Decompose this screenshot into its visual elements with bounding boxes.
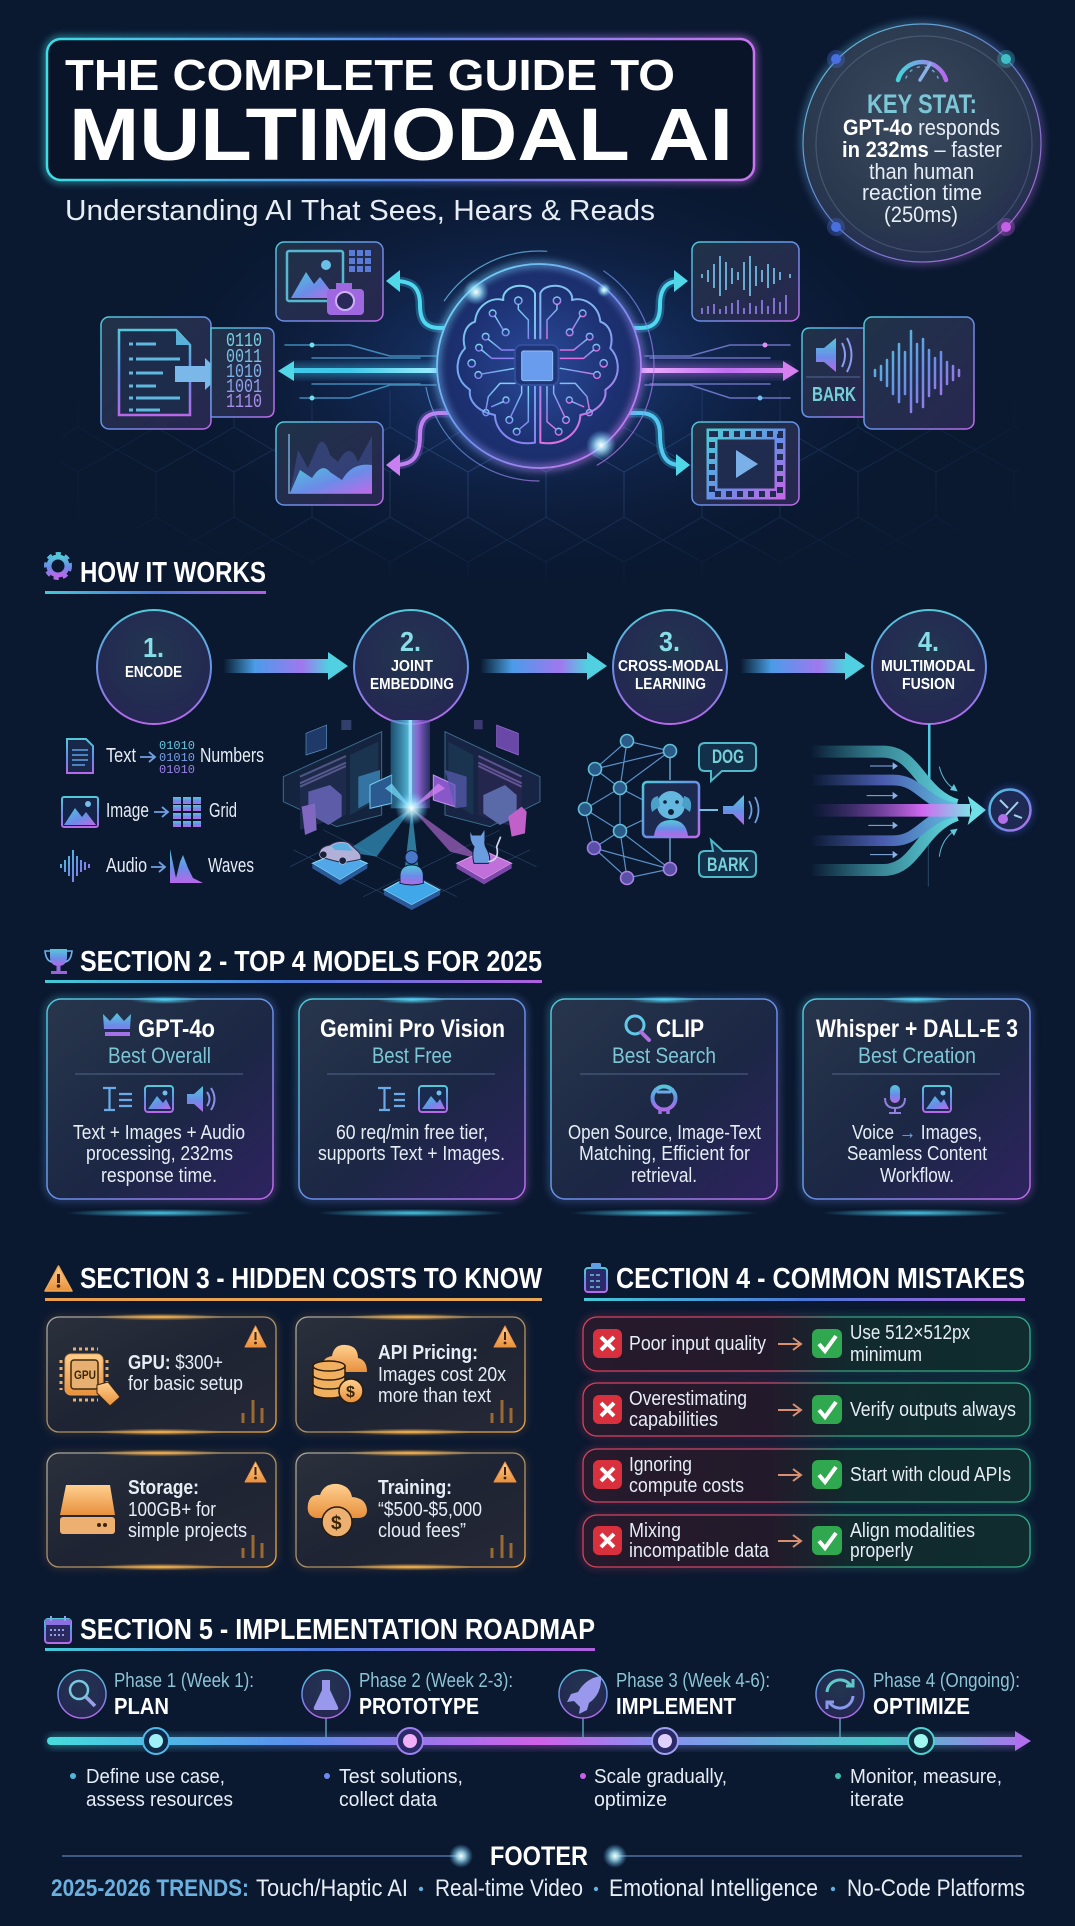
cost text xyxy=(128,1477,247,1542)
model card: Gemini Pro Vision xyxy=(299,996,525,1217)
icons: text, image xyxy=(378,1086,447,1112)
model card: Whisper + DALL-E 3 xyxy=(803,996,1030,1217)
cost text: 100GB+ for xyxy=(128,1499,216,1521)
icons: text, image, audio xyxy=(103,1086,214,1112)
heading: section 3 xyxy=(45,1263,543,1301)
card description: Text + Images + Audio xyxy=(73,1122,245,1144)
step 4 circle: 4. xyxy=(918,626,939,657)
mini bars xyxy=(243,1535,262,1558)
card: document xyxy=(101,317,222,429)
icon: warning xyxy=(245,1326,266,1347)
mistake row 2: Overestimating xyxy=(629,1388,747,1410)
icon: rocket xyxy=(567,1676,601,1714)
phase 2: collect data xyxy=(339,1789,438,1811)
row: image to grid xyxy=(62,797,237,827)
phase 1: Phase 1 (Week 1): xyxy=(114,1670,254,1692)
cost text: Storage: xyxy=(128,1477,199,1499)
mistake row 1 xyxy=(583,1317,1030,1371)
row: text to numbers: Numbers xyxy=(200,745,264,767)
icon: cloud dollar: $ xyxy=(331,1513,342,1534)
icon: trophy xyxy=(45,949,72,974)
row: image to grid: Image xyxy=(106,800,149,822)
cost card: API pricing xyxy=(296,1314,525,1436)
step 2 circle: JOINT xyxy=(391,658,433,675)
row: image to grid: Grid xyxy=(209,800,237,822)
arrow: step 1 to 2 xyxy=(223,652,348,680)
cost text xyxy=(128,1352,243,1395)
speech bubble: dog xyxy=(699,743,756,781)
trends line: Emotional Intelligence xyxy=(609,1875,818,1902)
card: binary xyxy=(211,328,274,417)
arrow: step 2 to 3 xyxy=(480,652,607,680)
row: text to numbers: 01010 xyxy=(159,751,195,765)
platforms xyxy=(312,851,512,910)
joint embedding illustration xyxy=(283,720,540,910)
icon: cloud coins: $ xyxy=(346,1384,355,1401)
mistake row 1: Use 512×512px xyxy=(850,1322,970,1344)
row: text to numbers: 01010 xyxy=(159,763,195,777)
mini bars xyxy=(492,1535,511,1558)
icon: cross xyxy=(593,1395,622,1424)
icon: fusion node xyxy=(987,787,1033,833)
mistake row 3: Ignoring xyxy=(629,1454,692,1476)
network lines xyxy=(585,741,676,878)
mistake row 2: Verify outputs always xyxy=(850,1399,1016,1421)
step 4 circle: MULTIMODAL xyxy=(881,658,975,675)
heading: section 3: SECTION 3 - HIDDEN COSTS TO KNOW xyxy=(80,1263,543,1295)
step 1 circle xyxy=(97,610,211,724)
card description xyxy=(73,1122,245,1187)
mistake row 4: incompatible data xyxy=(629,1540,770,1562)
step 4 circle xyxy=(872,610,986,724)
phase 3: Phase 3 (Week 4-6): xyxy=(616,1670,770,1692)
phase 2: Test solutions, xyxy=(339,1766,463,1788)
icon: check xyxy=(812,1395,842,1424)
floor grid xyxy=(290,830,537,907)
key stat body: GPT-4o responds xyxy=(843,115,1000,140)
step 3 circle: CROSS-MODAL xyxy=(618,658,723,675)
model card: GPT-4o: Best Overall xyxy=(108,1043,211,1068)
hero diagram xyxy=(101,242,974,505)
row: audio to waves xyxy=(61,849,254,883)
card description: response time. xyxy=(101,1165,217,1187)
model card: GPT-4o: GPT-4o xyxy=(138,1015,215,1043)
floating panels xyxy=(306,720,518,755)
cost text: simple projects xyxy=(128,1520,247,1542)
car xyxy=(319,841,361,864)
speech bubble: dog: DOG xyxy=(712,747,744,768)
icon: cross xyxy=(593,1329,622,1358)
cost text: Images cost 20x xyxy=(378,1364,506,1386)
model card: Gemini Pro Vision: Best Free xyxy=(372,1043,452,1068)
card description: Matching, Efficient for xyxy=(579,1143,750,1165)
card: speaker and bark: BARK xyxy=(812,384,856,406)
title box xyxy=(47,39,754,180)
cost text: GPU: $300+ xyxy=(128,1352,223,1374)
heading: section 5: SECTION 5 - IMPLEMENTATION ROADMAP xyxy=(80,1614,595,1646)
row: text to numbers xyxy=(67,739,264,777)
phase 4: Phase 4 (Ongoing): xyxy=(873,1670,1020,1692)
card: video player xyxy=(692,422,799,505)
phase 3 xyxy=(559,1670,770,1811)
card: area chart xyxy=(276,422,383,505)
cost text: Training: xyxy=(378,1477,452,1499)
cost card: storage xyxy=(47,1450,276,1570)
multimodal fusion streams xyxy=(810,724,1033,887)
key stat body xyxy=(842,115,1002,227)
icon: refresh xyxy=(827,1679,853,1709)
cost text: more than text xyxy=(378,1385,491,1407)
card description xyxy=(318,1122,505,1165)
timeline bar xyxy=(47,1718,1031,1751)
trends line: No-Code Platforms xyxy=(847,1875,1025,1902)
card: speaker and bark xyxy=(802,328,864,417)
footer xyxy=(51,1841,1025,1902)
model card: Gemini Pro Vision: Gemini Pro Vision xyxy=(320,1015,505,1043)
card description: Open Source, Image-Text xyxy=(568,1122,761,1144)
mistake row 4: Align modalities xyxy=(850,1520,975,1542)
card description: 60 req/min free tier, xyxy=(336,1122,488,1144)
row: audio to waves: Waves xyxy=(208,855,254,877)
heading: section 2: SECTION 2 - TOP 4 MODELS FOR 2025 xyxy=(80,946,542,978)
timeline node 1 xyxy=(143,1728,169,1754)
icon: gpu chip xyxy=(61,1349,120,1406)
icon: check xyxy=(812,1460,842,1489)
step 3 circle: LEARNING xyxy=(635,676,706,693)
mini bars xyxy=(243,1400,262,1423)
step 4 circle: FUSION xyxy=(902,676,955,693)
icon: gauge xyxy=(898,62,946,80)
icon: flask xyxy=(314,1680,338,1710)
phase 4: iterate xyxy=(850,1789,904,1811)
card: binary: 1001 xyxy=(226,376,262,398)
cost card: training xyxy=(296,1450,525,1570)
key stat body: reaction time xyxy=(862,180,982,205)
key stat body: than human xyxy=(869,159,974,184)
icon: check xyxy=(812,1329,842,1358)
icons: microphone, image xyxy=(885,1085,951,1113)
icon: speaker xyxy=(699,795,758,825)
model card: CLIP: Best Search xyxy=(612,1043,716,1068)
icon: magnifier xyxy=(70,1681,95,1706)
phase 3: Scale gradually, xyxy=(594,1766,727,1788)
phase 2: Phase 2 (Week 2-3): xyxy=(359,1670,513,1692)
step 1 circle: 1. xyxy=(143,632,164,663)
icon: check xyxy=(812,1526,842,1555)
model card: Whisper + DALL-E 3: Best Creation xyxy=(858,1043,976,1068)
heading: section 4: CECTION 4 - COMMON MISTAKES xyxy=(616,1263,1025,1295)
cost text: “$500-$5,000 xyxy=(378,1499,482,1521)
key stat heading: KEY STAT: xyxy=(867,89,977,119)
cost text: cloud fees” xyxy=(378,1520,466,1542)
card description xyxy=(568,1122,761,1187)
card description: processing, 232ms xyxy=(86,1143,233,1165)
title line 1: THE COMPLETE GUIDE TO xyxy=(65,51,675,100)
phase 4: OPTIMIZE xyxy=(873,1693,970,1719)
speech bubble: bark: BARK xyxy=(707,855,749,876)
card: image input xyxy=(276,242,383,321)
phase 3: optimize xyxy=(594,1789,667,1811)
trends line: Touch/Haptic AI xyxy=(256,1875,408,1902)
icon: github xyxy=(652,1086,676,1114)
cost text: for basic setup xyxy=(128,1373,243,1395)
footer: FOOTER xyxy=(490,1841,588,1871)
mistake row 3: compute costs xyxy=(629,1475,744,1497)
icon: warning xyxy=(494,1462,516,1482)
cost text xyxy=(378,1477,482,1542)
mistake row 4: Mixing xyxy=(629,1520,681,1542)
card description xyxy=(847,1122,987,1187)
brain core xyxy=(424,251,654,481)
speech bubble: bark xyxy=(699,840,756,877)
network nodes xyxy=(578,734,676,884)
model card: CLIP xyxy=(551,996,777,1217)
mistake row 4: properly xyxy=(850,1540,913,1562)
mistake row 4 xyxy=(583,1515,1030,1567)
icon: gear xyxy=(46,554,70,578)
card description: Voice → Images, xyxy=(852,1122,982,1144)
phase 2: PROTOTYPE xyxy=(359,1693,479,1719)
cost text xyxy=(378,1342,506,1407)
cost card: GPU xyxy=(47,1314,276,1436)
phase 1: Define use case, xyxy=(86,1766,225,1788)
icon: warning xyxy=(494,1326,516,1347)
row: text to numbers: 01010 xyxy=(159,739,195,753)
mini bars xyxy=(492,1400,511,1423)
mistake row 1: minimum xyxy=(850,1344,922,1366)
timeline node 2 xyxy=(397,1728,423,1754)
icon: cross xyxy=(593,1460,622,1489)
cross-modal network xyxy=(578,734,758,884)
room walls xyxy=(283,732,540,837)
subtitle: Understanding AI That Sees, Hears & Reads xyxy=(65,195,655,227)
mistake row 2: capabilities xyxy=(629,1409,718,1431)
card: binary: 0011 xyxy=(226,346,262,368)
dog image box xyxy=(643,782,699,837)
mistake row 1: Poor input quality xyxy=(629,1333,766,1355)
icon: crown xyxy=(103,1013,131,1036)
key stat body: in 232ms – faster xyxy=(842,137,1002,162)
phase 4 xyxy=(816,1670,1020,1811)
step 3 circle xyxy=(613,610,727,724)
phase 3: IMPLEMENT xyxy=(616,1693,736,1719)
row: text to numbers: Text xyxy=(106,745,136,767)
icon: storage drive xyxy=(60,1485,115,1534)
key stat body: (250ms) xyxy=(884,202,958,227)
step 2 circle: 2. xyxy=(400,626,421,657)
key stat badge xyxy=(802,23,1042,263)
card description: Workflow. xyxy=(880,1165,954,1187)
card description: Seamless Content xyxy=(847,1143,987,1165)
trends line: Real-time Video xyxy=(435,1875,583,1902)
icon: warning xyxy=(45,1266,72,1291)
connector beams xyxy=(278,270,799,476)
trends line xyxy=(51,1875,1025,1902)
card: binary: 0110 xyxy=(226,330,262,352)
card: large waveform xyxy=(864,317,974,429)
card description: retrieval. xyxy=(631,1165,697,1187)
row: audio to waves: Audio xyxy=(106,855,147,877)
cat xyxy=(470,828,501,863)
icon: cloud coins xyxy=(313,1345,367,1403)
icon: brain circuit xyxy=(458,286,618,443)
card: binary: 1010 xyxy=(226,361,262,383)
phase 1 xyxy=(58,1670,254,1811)
background xyxy=(60,211,1020,578)
timeline node 3 xyxy=(652,1728,678,1754)
step 2 circle: EMBEDDING xyxy=(370,676,454,693)
card description: supports Text + Images. xyxy=(318,1143,505,1165)
heading: how it works xyxy=(45,554,266,594)
icon: clipboard xyxy=(585,1263,607,1292)
step 2 circle xyxy=(354,610,468,724)
model card: CLIP: CLIP xyxy=(656,1015,704,1043)
step 3 circle: 3. xyxy=(659,626,680,657)
timeline node 4 xyxy=(908,1728,934,1754)
icon: cross xyxy=(593,1526,622,1555)
encode list xyxy=(61,739,264,883)
icon: calendar xyxy=(45,1616,71,1643)
cost text: API Pricing: xyxy=(378,1342,478,1364)
mistake row 3 xyxy=(583,1449,1030,1502)
icon: cloud dollar xyxy=(308,1484,367,1537)
trends line: 2025-2026 TRENDS: xyxy=(51,1875,249,1902)
phase 1: assess resources xyxy=(86,1789,233,1811)
model card: GPT-4o xyxy=(47,996,273,1217)
heading: how it works: HOW IT WORKS xyxy=(80,557,266,589)
model card: Whisper + DALL-E 3: Whisper + DALL-E 3 xyxy=(816,1015,1018,1043)
card: audio spectrum xyxy=(692,242,799,321)
icon: gpu chip: GPU xyxy=(74,1368,96,1382)
light beams xyxy=(345,720,483,867)
implementation timeline xyxy=(47,1670,1031,1811)
title line 2: MULTIMODAL AI xyxy=(69,93,733,176)
step 1 circle: ENCODE xyxy=(125,664,182,681)
icon: magnifier xyxy=(626,1016,649,1040)
icon: warning xyxy=(245,1462,266,1482)
phase 1: PLAN xyxy=(114,1693,169,1719)
phase 4: Monitor, measure, xyxy=(850,1766,1002,1788)
phase 2 xyxy=(302,1670,513,1811)
mistake row 2 xyxy=(583,1383,1030,1436)
arrow: step 3 to 4 xyxy=(740,652,865,680)
mistake row 3: Start with cloud APIs xyxy=(850,1464,1011,1486)
person xyxy=(400,851,423,885)
card: binary: 1110 xyxy=(226,391,262,413)
